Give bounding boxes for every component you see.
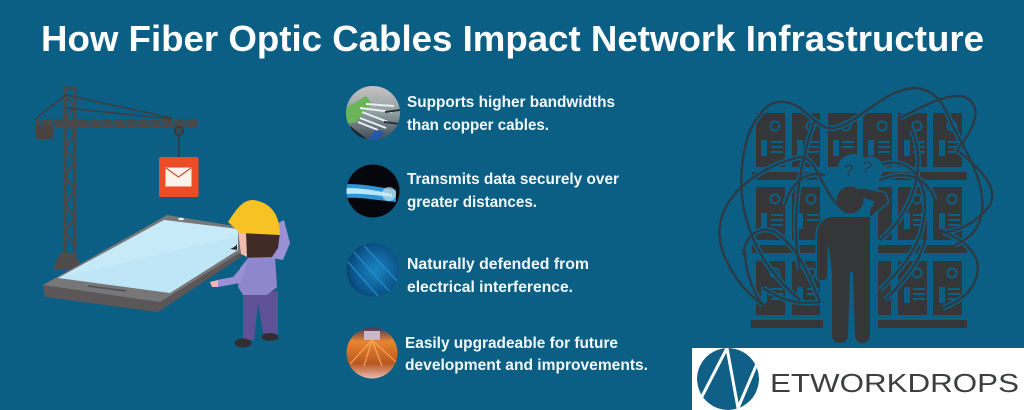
text: interference: Naturally defended from [407, 256, 589, 273]
text: interference: electrical interference. [407, 279, 573, 296]
question bubble: ? [844, 161, 853, 180]
question bubble [838, 154, 883, 192]
icon: smartphone [43, 215, 241, 312]
logo: networkdrops [692, 348, 1024, 410]
icon: confused person [817, 186, 888, 343]
icon: fiber bundle photo [346, 86, 400, 140]
question bubble: ? [860, 157, 874, 178]
title: How Fiber Optic Cables Impact Network Infrastructure [41, 18, 984, 59]
text: bandwidth: Supports higher bandwidths [407, 94, 615, 111]
logo wordmark: ETWORKDROPS [770, 368, 1019, 398]
text: security: Transmits data securely over [407, 171, 619, 188]
icon: mail block [159, 157, 198, 197]
item: interference [346, 243, 589, 297]
icon: crane [35, 88, 197, 269]
text: upgradeable: Easily upgradeable for future [405, 335, 618, 352]
icon: glowing fiber photo [346, 164, 400, 218]
text: bandwidth: than copper cables. [407, 117, 549, 134]
icon: server racks [751, 113, 967, 328]
icon: blue fibers photo [346, 243, 400, 297]
logo mark [696, 348, 762, 410]
item: security [346, 164, 619, 218]
item: upgradeable [346, 327, 648, 379]
logo background [692, 348, 1024, 410]
item: bandwidth [346, 86, 615, 140]
rack details [770, 122, 960, 299]
rack slots [761, 140, 945, 303]
illustration: server racks and confused person [719, 88, 992, 343]
tangled cables [719, 88, 992, 308]
icon: construction worker [210, 200, 290, 348]
text: upgradeable: development and improvements. [405, 357, 648, 374]
text: security: greater distances. [407, 194, 537, 211]
illustration: crane, phone and worker [35, 88, 290, 348]
list: fiber benefits [346, 86, 648, 379]
icon: orange fibers photo [346, 327, 398, 379]
